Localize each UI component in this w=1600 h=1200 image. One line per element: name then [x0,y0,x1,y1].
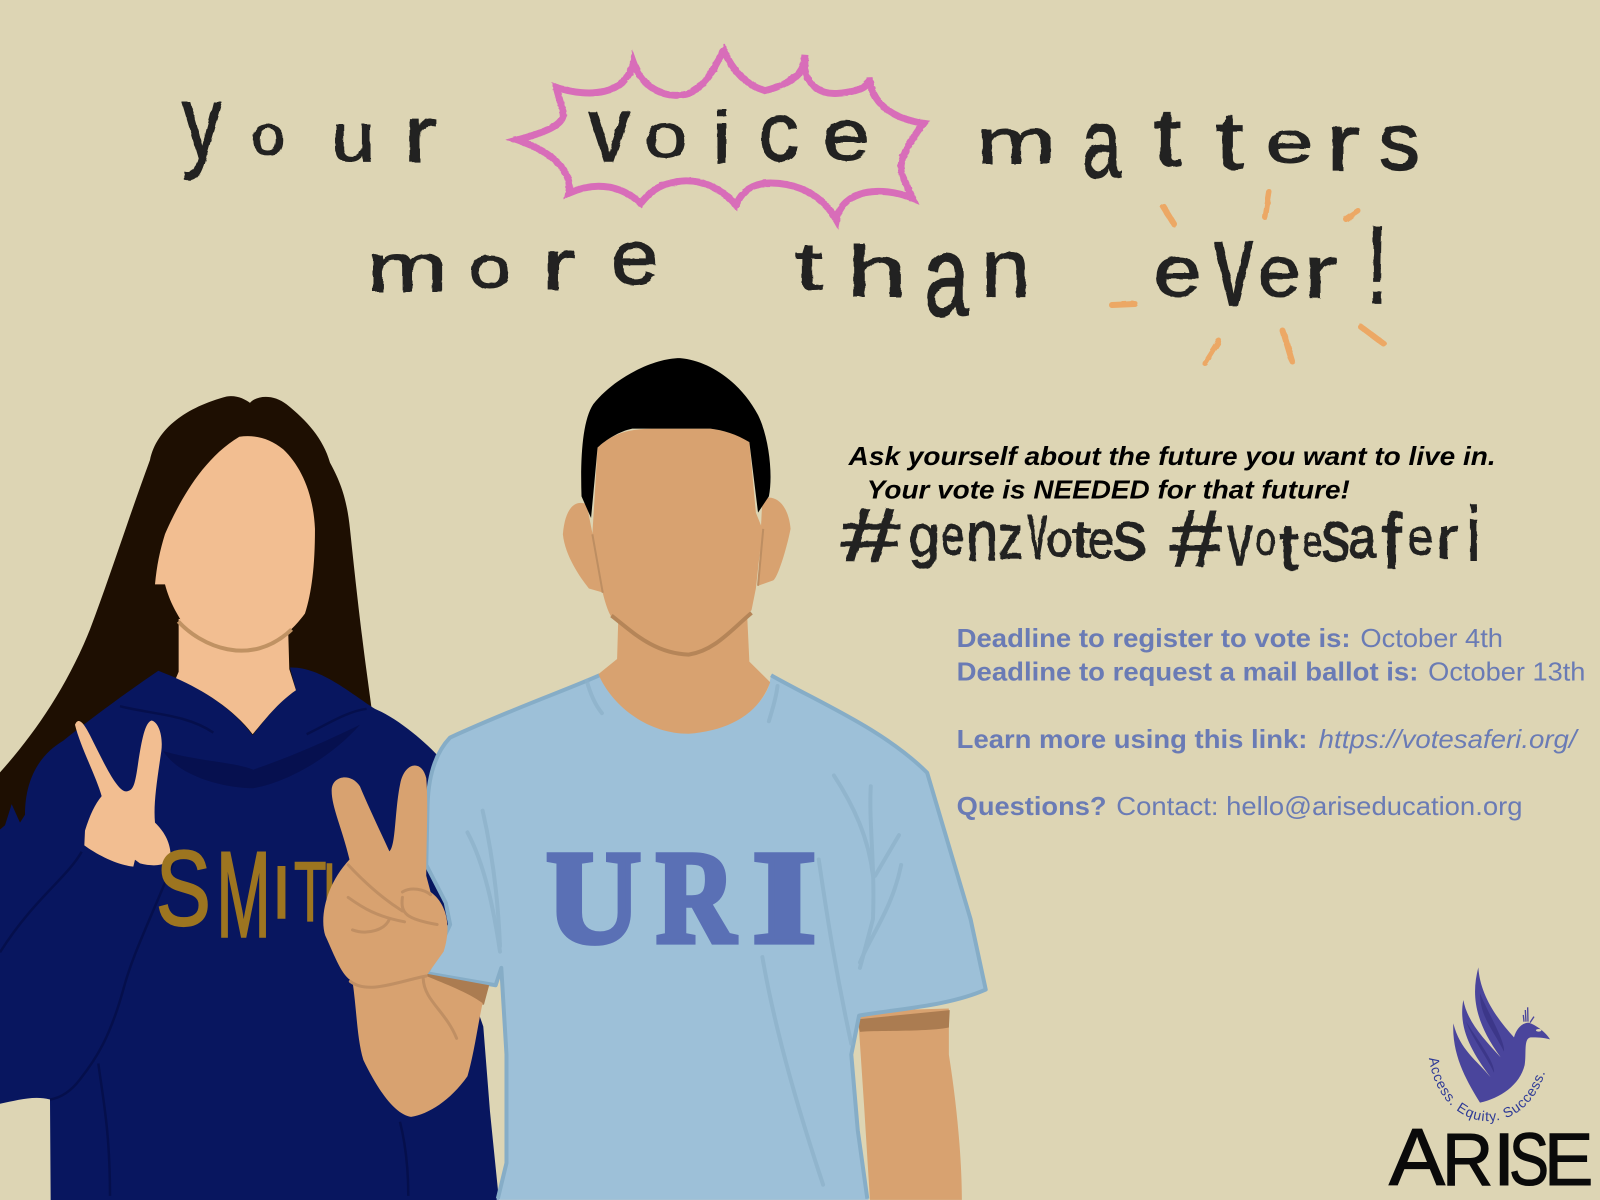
title: more than ever: v [1214,199,1253,331]
title: your voice matters: r [404,92,437,179]
hashtags: o [1256,513,1275,565]
figure: girl in navy Smith hoodie [0,396,499,1200]
hashtags: i [1467,491,1480,577]
hashtags: t [1072,510,1091,569]
question text: Your vote is NEEDED for that future! [867,474,1350,504]
question text: Ask yourself about the future you want to live in. [848,441,1496,471]
contact: Questions? [957,793,1106,821]
ARISE wordmark: S [1509,1119,1549,1200]
title: your voice matters: o [251,105,285,167]
hashtags: e [941,506,964,567]
contact: Contact: hello@ariseducation.org [1116,793,1522,821]
hashtags: s [1322,496,1350,577]
title: more than ever: e [610,216,659,301]
logo tagline on curve: Access. Equity. Success. [1428,1058,1545,1124]
URI shirt lettering: I [752,824,817,971]
question text [848,441,1496,504]
title: your voice matters: m [976,107,1056,177]
mail ballot deadline [957,658,1585,686]
learn more link [957,726,1580,754]
Smith shirt lettering [156,827,359,963]
title: more than ever: o [469,236,511,301]
title: your voice matters: o [644,101,688,171]
ARISE wordmark: R [1442,1119,1493,1200]
Smith shirt lettering: I [272,852,291,934]
title: more than ever: ! [1366,202,1388,327]
hashtags: o [1047,513,1072,568]
voter deadline information [957,625,1585,821]
boy left arm and peace sign hand [323,765,489,1117]
girl peace sign hand [75,720,171,867]
hashtags: e [1302,517,1322,566]
learn more link: Learn more using this link: [957,726,1307,754]
hashtags: s [1113,498,1147,575]
mail ballot deadline: October 13th [1428,658,1585,686]
title: more than ever: e [1154,232,1202,311]
title: more than ever: h [847,232,907,312]
hashtags: e [1088,512,1114,569]
mail ballot deadline: Deadline to request a mail ballot is: [957,658,1418,686]
URI shirt lettering: U [546,824,641,971]
title: more than ever: r [542,226,575,306]
title: your voice matters: e [1266,110,1314,175]
register deadline [957,625,1503,653]
hashtags: t [1279,510,1299,584]
Smith shirt lettering: S [156,830,211,949]
title: your voice matters: e [822,95,870,175]
hashtags: n [966,497,998,575]
hashtags: # [841,494,900,577]
title: your voice matters: t [1216,95,1243,187]
title: your voice matters: s [1378,98,1420,187]
URI shirt lettering [546,824,817,971]
hashtags: v [1028,487,1046,576]
hashtags [841,487,1480,585]
figure: boy in light blue URI t-shirt [323,358,986,1200]
hashtags: e [1408,509,1433,566]
hashtags: # [1170,495,1221,584]
ARISE wordmark: A [1389,1112,1445,1200]
title: your voice matters: c [759,86,799,178]
hashtags: r [1436,506,1459,571]
title: more than ever: e [1258,232,1301,311]
hashtags: a [1348,506,1377,570]
Smith shirt lettering: M [216,827,271,963]
ARISE wordmark: I [1493,1119,1515,1200]
title: your voice matters: a [1082,90,1122,199]
Smith shirt lettering: T [294,844,326,938]
title: more than ever: m [367,229,448,306]
ARISE wordmark [1389,1112,1593,1200]
title: your voice matters: v [589,77,630,182]
pink speech burst around voice [517,51,923,220]
URI shirt lettering: R [656,824,737,971]
ARISE logo [1388,968,1593,1200]
contact [957,793,1522,821]
register deadline: October 4th [1360,625,1503,653]
title: more than ever: t [795,229,823,304]
ARISE wordmark: E [1544,1118,1593,1200]
register deadline: Deadline to register to vote is: [957,625,1351,653]
title: your voice matters: u [331,99,375,176]
title: your voice matters: i [712,96,732,179]
title: your voice matters: t [1154,92,1181,184]
title: more than ever: n [981,224,1031,315]
girl neck and face [155,436,315,734]
hashtags: v [1227,499,1252,581]
learn more link: https://votesaferi.org/ [1319,726,1580,754]
hashtags: f [1382,498,1402,585]
boy hair [581,358,771,518]
navy hoodie [0,667,499,1200]
girl hair [0,396,372,846]
title: your voice matters: r [1326,99,1360,188]
hashtags: g [909,504,939,568]
orange emphasis rays around ever [1112,192,1384,363]
boy right arm [857,1009,962,1200]
title: more than ever: a [924,212,969,340]
title: more than ever [367,199,1388,340]
title: more than ever: r [1304,230,1337,314]
icon: phoenix [1453,967,1550,1103]
blue t-shirt [426,675,986,1200]
hashtags: z [998,503,1023,571]
title: your voice matters [182,63,1420,199]
boy neck ears and face [563,429,791,734]
title: your voice matters: y [182,63,221,181]
Smith shirt lettering: H [323,849,359,931]
